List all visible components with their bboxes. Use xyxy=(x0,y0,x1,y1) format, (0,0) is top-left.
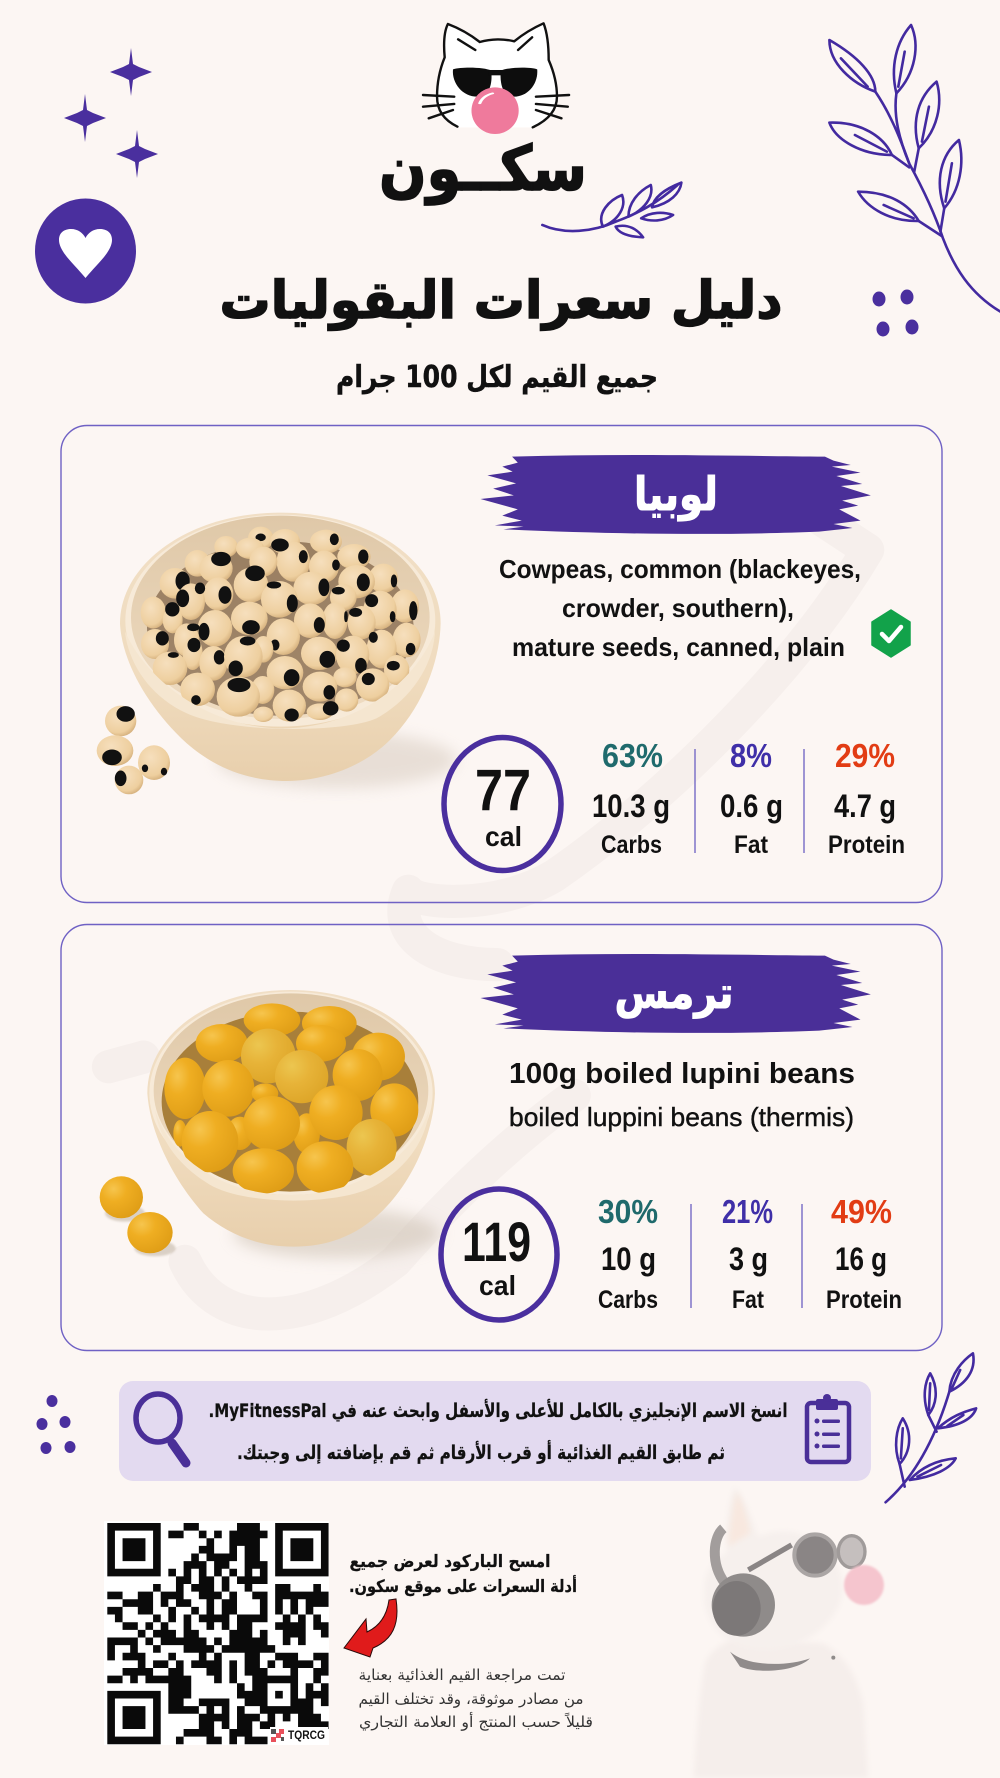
macro: protein: Protein xyxy=(828,831,905,859)
macro: protein: 4.7 g xyxy=(834,788,896,824)
arrow to QR xyxy=(344,1599,397,1657)
macro: protein: 49% xyxy=(831,1193,892,1230)
icon: small branch right xyxy=(886,1353,976,1502)
instruction text xyxy=(208,1399,787,1464)
name banner xyxy=(480,954,871,1033)
disclaimer text: تمت مراجعة القيم الغذائية بعناية xyxy=(358,1666,566,1684)
icon: decorative dots left xyxy=(36,1395,76,1454)
card border xyxy=(61,426,942,902)
icon: sparkle stars xyxy=(64,48,158,178)
QR logo xyxy=(270,1727,328,1744)
macro: carbs: Carbs xyxy=(598,1286,658,1314)
watermark swoosh xyxy=(108,483,868,1314)
macro: protein: Protein xyxy=(826,1286,902,1314)
QR caption: امسح الباركود لعرض جميع xyxy=(350,1552,550,1572)
macro: fat: 21% xyxy=(722,1193,773,1230)
calorie circle xyxy=(441,1189,557,1320)
card border xyxy=(61,924,942,1350)
brand name: سكــون xyxy=(379,132,587,205)
description text xyxy=(509,1058,855,1132)
loose lupini beans xyxy=(100,1176,176,1256)
macro: fat: 0.6 g xyxy=(720,788,783,824)
disclaimer text xyxy=(358,1666,593,1732)
loose cowpeas xyxy=(97,706,170,794)
name banner xyxy=(480,455,871,534)
macro: carbs: 10 g xyxy=(601,1241,656,1277)
banner text: لوبيا xyxy=(634,467,718,521)
bowl of cowpeas xyxy=(120,513,457,788)
bowl of lupini beans xyxy=(147,990,440,1258)
icon: cat logo xyxy=(423,23,569,134)
brush stroke xyxy=(480,455,871,534)
disclaimer text: من مصادر موثوقة، وقد تختلف القيم xyxy=(358,1690,584,1708)
macro: carbs: 10.3 g xyxy=(592,788,670,824)
description text: crowder, southern), xyxy=(562,593,794,623)
macro: protein xyxy=(828,737,905,859)
calorie circle: 119 xyxy=(462,1210,531,1273)
instruction text: ثم طابق القيم الغذائية أو قرب الأرقام ثم قم بإضافته إلى وجبتك. xyxy=(237,1440,725,1464)
macro: fat: Fat xyxy=(732,1286,765,1314)
brush stroke xyxy=(480,954,871,1033)
title: دليل سعرات البقوليات xyxy=(220,271,782,331)
icon: clipboard xyxy=(807,1394,849,1462)
QR logo: TQRCG xyxy=(288,1728,325,1742)
macro: protein: 29% xyxy=(835,737,895,774)
macro: protein: 16 g xyxy=(835,1241,887,1277)
macro: carbs: 63% xyxy=(602,737,663,774)
icon: decorative dots top right xyxy=(872,290,918,336)
description text: Cowpeas, common (blackeyes, xyxy=(499,554,861,584)
macro: carbs: Carbs xyxy=(601,831,662,859)
panel: instructions box xyxy=(119,1381,871,1481)
macro: fat: Fat xyxy=(734,831,769,859)
macro: carbs xyxy=(592,737,670,859)
calorie circle: 77 xyxy=(475,758,531,823)
QR caption xyxy=(349,1552,577,1597)
macro: fat xyxy=(720,737,783,859)
macro: fat: 8% xyxy=(730,737,772,774)
icon: magnifier xyxy=(136,1394,186,1463)
panel: lupini card xyxy=(61,924,942,1350)
QR code xyxy=(104,1521,329,1745)
icon: verified shield xyxy=(872,610,910,657)
calorie circle xyxy=(444,738,561,870)
macro: protein xyxy=(826,1193,902,1314)
macro: fat: 3 g xyxy=(729,1241,768,1277)
calorie circle: cal xyxy=(485,821,522,852)
banner text: ترمس xyxy=(614,968,734,1019)
panel: cowpeas card xyxy=(61,426,942,902)
macro: carbs xyxy=(598,1193,658,1314)
description text: boiled luppini beans (thermis) xyxy=(509,1102,854,1132)
icon: small leaf sprig xyxy=(542,183,681,237)
description text: mature seeds, canned, plain xyxy=(512,632,845,662)
macro: carbs: 30% xyxy=(598,1193,658,1230)
icon: large leaf branch xyxy=(829,25,1000,312)
disclaimer text: قليلاً حسب المنتج أو العلامة التجاري xyxy=(359,1712,593,1732)
QR caption: أدلة السعرات على موقع سكون. xyxy=(349,1575,577,1597)
description text xyxy=(499,554,861,662)
calorie circle: cal xyxy=(479,1270,516,1301)
cat illustration xyxy=(693,1487,884,1778)
description text: 100g boiled lupini beans xyxy=(509,1058,855,1090)
macro: fat xyxy=(722,1193,773,1314)
subtitle: جميع القيم لكل 100 جرام xyxy=(336,360,658,395)
instruction text: انسخ الاسم الإنجليزي بالكامل للأعلى والأسفل وابحث عنه في MyFitnessPal. xyxy=(208,1399,787,1423)
icon: heart badge xyxy=(35,198,136,304)
